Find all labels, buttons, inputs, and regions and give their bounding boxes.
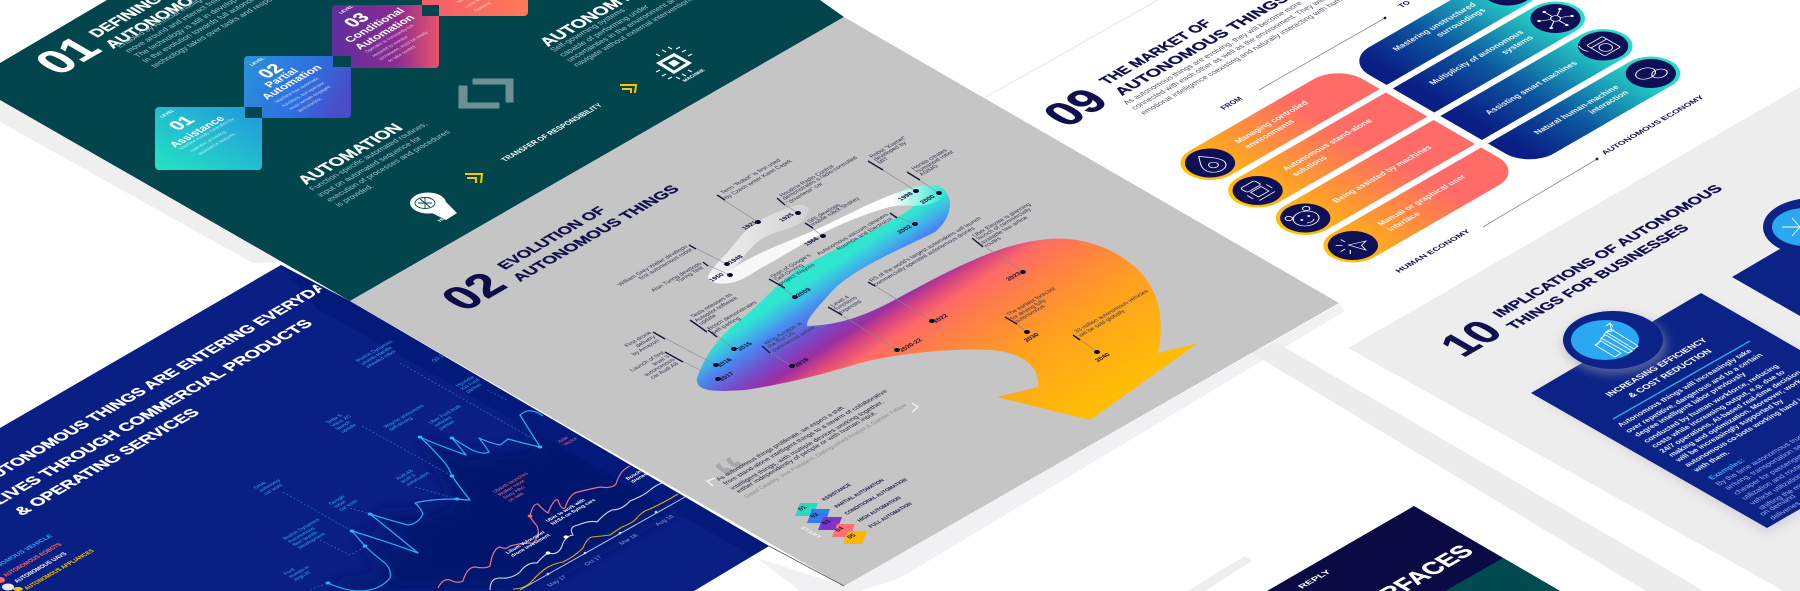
to pill labels: Natural human-machine [1531,83,1622,136]
robot event labels: Anki [557,436,570,444]
automation levels legend: 04 [834,526,846,533]
automation levels legend: FULL AUTOMATION [868,502,914,529]
timeline event labels: project Waymo [778,263,818,286]
card heading: INCREASING EFFICIENCY [1603,336,1710,398]
vehicle event labels [253,340,484,582]
level 3 tile: required to monitor [371,35,411,58]
chart shaded area [345,428,673,591]
timeline event labels: Self-Driving [774,264,806,282]
darker top band [281,265,769,556]
to pill labels [1379,1,1631,147]
quote block: either independently of people or with human input. [735,410,879,494]
chart legend [0,533,96,591]
timeline event labels [617,136,1151,380]
card: increasing efficiency [1531,293,1800,528]
card body: degree intelligent labor previously [1632,371,1749,438]
timeline leaders [659,165,1097,379]
UAV event labels: NASA on flying cars [550,498,598,526]
timeline event labels: Robot "Kismet" [869,136,909,159]
automation levels legend: START [798,526,822,540]
timeline event labels: Level 4 [830,295,852,308]
timeline event labels: RS of the world's largest automakers will launch [869,217,984,283]
timeline event labels: Uber Elevate is planning [972,203,1033,238]
timeline event labels: ASIMO [919,164,941,177]
quote block: David Cearley, Vice President, Distinguished Analyst & Gartner Fellow [744,403,910,499]
timeline event labels: Alan Turing develops [650,262,704,293]
from pill labels: interface [1384,210,1423,233]
automation levels legend [795,478,914,544]
level 2 tile [244,56,351,118]
level 2 tile: LEVEL [249,57,266,67]
timeline event labels: Honda creates [911,149,949,171]
level 3 tile [332,5,439,68]
timeline event labels: Wing Aviation is [763,322,804,346]
vehicle event labels: Q3 18 [431,353,448,363]
quote block: As autonomous things proliferate, we expect a shift [715,406,846,482]
panel: reply interfaces [1267,506,1560,591]
panel heading: & OPERATING SERVICES [11,406,204,518]
robot event labels: Sony Aibo [502,485,527,500]
quote block: intelligent things, with multiple devices working together, [729,400,886,491]
chart legend: AUTONOMOUS ROBOTS [2,542,64,578]
panel 09: the market of autonomous things [1031,0,1706,274]
robot event labels: Vector [562,437,580,447]
from-to axis: FROM [1218,95,1245,111]
level 4 tile [422,0,528,16]
automation text block: AUTOMATION [293,121,407,187]
icon: central transfer bracket [459,79,513,108]
icon: cursor [1317,225,1388,266]
timeline event labels: launch of commercially [976,208,1033,241]
card shadow [1535,298,1800,534]
vehicle event labels: Volvo XC [330,414,353,428]
vehicle event labels: Autonomous [287,526,317,544]
level 2 tile: and monitor. [297,97,325,113]
automation levels legend: PARTIAL AUTOMATION [834,478,886,509]
card body: 24/7 operations, AI-based real-time decision [1657,369,1800,454]
timeline years: 2009 [795,287,814,298]
card body: over repetitive, dangerous and to a certain [1623,352,1765,434]
autonomous robots line [438,466,630,588]
heading: THE MARKET OF [1096,17,1216,87]
chart legend: AUTONOMOUS APPLIANCES [23,548,96,591]
automation levels legend: HIGH AUTOMATION [857,496,903,523]
level 3 tile: Conditional [342,6,408,45]
human to autonomous economy axis: AUTONOMOUS ECONOMY [1599,94,1706,156]
timeline event labels: First drone [624,331,654,348]
chart axis: May 17 [547,575,569,588]
icon: efficiency chart badge [1563,311,1667,374]
from pill labels: Autonomous stand-alone [1279,117,1375,172]
timeline event labels: will be sold globally [1077,309,1127,339]
vehicle event labels: partner [465,383,484,394]
autonomous UAVs line [490,483,662,590]
card body [1615,347,1800,474]
quote block [699,389,918,499]
card examples: Examples: [1706,457,1747,481]
from pill labels: Managing controlled [1232,99,1310,145]
timeline event labels: demonstrates a radio-controlled [782,156,860,201]
vehicle event labels: Waymo announces [383,404,426,429]
timeline years: 2023 [1005,271,1024,282]
timeline years: 2019 [793,357,812,368]
timeline event labels: Bosch demonstrates [707,301,759,331]
heading: IMPLICATIONS OF AUTONOMOUS [1490,183,1727,320]
panel: autonomous things entering everyday lives [0,265,769,591]
icon: face [1270,198,1341,238]
timeline event labels: Start of Google's [770,254,813,279]
icon: smart washing machine [1568,26,1639,66]
timeline event labels: Roomba and Electrolux [836,217,895,251]
level 2 tile: Machine has automatic [274,76,322,104]
icon: human head: HUMAN [437,211,458,223]
icon: robot [1222,170,1293,211]
automation levels legend: CONDITIONAL AUTOMATION [844,478,909,516]
from-to axis [1218,0,1413,111]
to pill labels: interaction [1586,89,1631,115]
timeline event labels: by Czech writer Karel Čapek [723,159,794,200]
card body: with them. [1690,449,1732,474]
timeline years: 1948 [727,254,746,265]
green section [1445,558,1560,591]
chart axis [520,497,685,590]
vehicle event labels: Boston Dynamics [355,340,395,363]
card body: Autonomous things will increasingly take [1615,347,1755,428]
UAV event labels: Bosch [625,470,643,481]
timeline event labels: The earliest forecast [1006,287,1058,317]
label: transfer of responsibility: TRANSFER OF RESPONSIBILITY [499,102,605,163]
level 2 tile: Partial [262,67,302,90]
from pills [1168,65,1523,270]
icon: chat bubbles [1615,53,1686,94]
tile joint squares [245,5,439,118]
vehicle event labels: robot [333,500,348,509]
timeline event labels: self-parking [711,317,743,335]
timeline years: 2020-22 [898,337,925,353]
panel 10: implications for businesses [1348,87,1800,591]
autonomous appliances line [513,494,678,589]
section number 02: 02 [429,265,518,317]
timeline: main swoosh and arrow [697,187,1198,420]
timeline years [708,191,1113,382]
icon: top row partial [1472,0,1543,12]
automation text block: execution of processes and procedures [324,129,452,203]
vehicle event labels: invests in [288,565,312,579]
timeline event labels: 33 million autonomous vehicles [1074,289,1151,334]
icon: network [1520,0,1591,39]
human to autonomous economy axis: HUMAN ECONOMY [1393,228,1473,274]
quote block: “ [699,448,778,494]
timeline event labels: mobile robot Shakey [810,197,862,227]
timeline years: 1925 [778,212,797,223]
chart axis: Aug 18 [655,514,677,527]
timeline event labels: William Grey Walter develops [617,245,690,287]
timeline event labels: delivery [635,335,658,348]
timeline event labels: autonomous [1014,305,1047,324]
chart axis: Oct 17 [584,555,605,567]
automation text block: is provided. [333,183,376,208]
level 2 tile: functions, but operator [281,81,327,108]
timeline years: 2022 [932,313,951,324]
card examples: on demand [1757,493,1798,517]
timeline years: 1921 [741,220,760,231]
timeline years: 2002 [896,224,915,235]
body paragraph: As autonomous things are evolving, they will become more [1121,0,1304,106]
vehicle event labels: Tesla S [325,413,345,425]
level 2 tile: 02 [253,61,288,81]
vehicle event labels: autonomy [258,478,283,493]
timeline label bars [653,161,1080,362]
timeline years: 2015 [736,341,755,352]
from pill labels: solutions [1289,154,1330,178]
timeline event labels: Autopilot software [694,296,741,323]
UAV event labels: drones [630,472,650,484]
vehicle event labels: partner [438,420,457,431]
automation levels legend: 01 [797,505,809,512]
section number 10: 10 [1429,314,1514,363]
chart legend: AUTONOMOUS UAVS [13,551,69,584]
timeline event labels: Term "Robot" is first used [720,158,783,195]
panel 02: evolution of autonomous things [350,17,1339,586]
timeline event labels: commercially operated autonomous drones [873,227,977,287]
heading: AUTONOMOUS THINGS [509,183,684,284]
to pill labels: Assisting smart machines [1482,59,1580,116]
icon: machine chip: MACHINE [682,68,707,83]
reply logo: REPLY [1296,568,1334,590]
human to autonomous economy axis [1393,94,1706,274]
icon: water drop [1174,142,1246,184]
timeline years: 2016 [716,357,735,368]
vehicle event labels: Kia Ford [460,378,482,391]
level 1 tile: Machine mostly controlled by [178,117,237,151]
level 1 tile: LEVEL [159,109,176,119]
timeline years: 1966 [803,236,822,247]
vehicle event labels: automation [405,471,432,487]
automation levels legend: ASSISTANCE [821,483,854,502]
timeline years: 2017 [718,371,737,382]
section number 01: 01 [23,29,112,81]
vehicle event labels: Boston Dynamics [282,518,322,541]
card body: conducted by human workforce, reducing [1641,363,1781,444]
automation text block [293,121,452,208]
level 1 tile: operator, providing [189,130,228,153]
robot event labels: on sale [507,492,526,503]
timeline event labels: by Amazon [631,339,662,357]
icon: yellow arrow near human [465,174,482,183]
card examples [1706,423,1800,521]
timeline event labels: available taxi airline [980,216,1031,245]
timeline event labels: Houdina Radio Control [779,165,836,198]
vehicle event labels: car tests [338,499,360,512]
level 3 tile: 03 [339,10,374,30]
timeline event labels: "driverless" car [786,182,825,205]
timeline event labels: for driving fully [1010,299,1048,321]
automation levels legend: 03 [821,519,833,526]
chart event markers [326,436,568,584]
timeline event labels: humanoid robot [915,150,956,174]
timeline event labels: Autonomous vacuum cleaners [816,213,891,256]
level 3 tile: to take control [387,45,418,63]
timeline years: 2000 [919,194,938,205]
vehicle event labels: development [297,532,328,550]
timeline event labels: routes [984,237,1003,248]
card body: costs while increasing output, e.g. due to [1649,369,1788,449]
vehicle event labels: wheeled robot [365,349,398,369]
heading: THINGS FOR BUSINESSES [1504,222,1694,332]
timeline years: 2030 [1023,332,1042,343]
timeline event labels: level 3 [652,355,672,367]
vehicle event labels: Google [328,495,347,506]
second card [1732,198,1800,316]
vehicle event labels: level 3 [400,473,418,484]
dashed leaders [283,363,540,590]
UAV event labels: Uber to work with [545,498,587,523]
vehicle event labels: vehicles [433,415,454,428]
vehicle event labels: Drive [253,481,268,490]
timeline event labels: functions [834,296,859,311]
timeline dots [713,189,1100,381]
icon: machine chip [656,47,707,83]
level 4 tile: Optional [473,1,493,13]
timeline years: 2040 [1094,352,1113,363]
timeline event labels: first autonomous robot [638,248,695,281]
timeline event labels: car Audi A8 [649,362,681,380]
autonomous vehicle line [328,411,543,591]
heading: EVOLUTION OF [494,204,611,272]
robot event labels: Ubtech launches [492,471,531,494]
autonomy text block: Self-governing systems: [548,6,630,53]
vehicle event labels: unveils Handle [360,346,394,366]
level 3 tile: Operator is constantly not [364,23,416,54]
vehicle event labels: Ford [283,568,297,576]
from pill labels [1229,85,1487,234]
timeline event labels: Tesla releases its [690,293,734,319]
timeline event labels: the first US [767,331,797,349]
body paragraph: connected with each other as well as the environment. They will [1129,0,1327,111]
robot event labels [492,436,580,503]
level 3 tile: Automation [352,13,418,52]
level 1 tile [155,107,262,170]
quote block: from stand-alone intelligent things to a swarm of collaborative [722,389,890,486]
UAV event labels [505,470,650,558]
level 1 tile: 01 [164,113,199,133]
timeline event labels: autonomous [643,358,677,377]
card body: will be increasingly supported by [1672,397,1786,464]
to pill labels: systems [1498,34,1536,56]
timeline event labels: commercial airline [771,326,818,353]
timeline: faded first loop [708,205,809,277]
icon: human head [410,192,458,223]
vehicle event labels: Audi A8 [395,469,415,481]
automation levels legend: 05 [846,533,858,540]
timeline: white ribbon [708,185,946,284]
from pill labels: environments [1241,118,1297,150]
vehicle event labels: Hyundai [455,375,476,388]
to pill labels: surroundings [1433,6,1488,38]
icon: yellow arrow near machine [620,85,636,93]
vehicle event labels: Uber Ford Audi [428,405,463,425]
autonomy text block: capable of performing under [557,3,652,58]
to pill labels: Multiplicity of autonomous [1426,28,1526,86]
timeline event labels: MIT [877,157,891,165]
panel 01: defining autonomous things [0,0,844,301]
from pill labels: Manual or graphical user [1375,173,1469,227]
level 1 tile: assistance features. [197,132,239,156]
vehicle event labels: car tests [263,483,285,496]
from pill labels: Being assisted by machines [1330,143,1435,204]
timeline event labels: Launch of first [629,351,667,373]
robot event labels: Walker robot [497,479,528,497]
automation text block: Function-specific automated routines; [307,121,430,192]
chart axis: Mar 18 [619,533,640,546]
level 3 tile: processes, must be ready [378,30,431,61]
to pill labels: Mastering unstructured [1390,1,1478,52]
section number 09: 09 [1031,81,1120,133]
vehicle event labels: launch [335,420,353,431]
level 2 tile: Automation [259,63,325,102]
timeline years: 1998 [897,191,916,202]
UAV event labels: drone investment [510,533,552,558]
timeline event labels: developed by [873,141,909,162]
timeline event labels: update [698,314,719,326]
level 3 tile: LEVEL [338,5,355,15]
vehicle event labels: Argo AI [293,570,312,582]
automation levels legend: 02 [809,512,821,519]
timeline event labels: SRI develops [807,203,843,224]
vehicle event labels: update [340,423,359,434]
timeline years: 1950 [708,272,727,283]
timeline event labels: Turing Test [675,266,706,284]
level 2 tile: must remain engaged [288,85,333,111]
pills matrix [1168,0,1692,270]
vehicle event labels: fleet launch [292,531,320,547]
UAV event labels: Lilium Volocopter [505,530,547,555]
to pills [1345,0,1692,168]
card heading: & COST REDUCTION [1625,347,1714,399]
timeline event labels: expected [838,300,864,315]
level 1 tile: Assistance [167,114,228,150]
automation text block: input on automated sequence for [315,135,424,198]
vehicle event labels: self-driving [388,416,415,432]
